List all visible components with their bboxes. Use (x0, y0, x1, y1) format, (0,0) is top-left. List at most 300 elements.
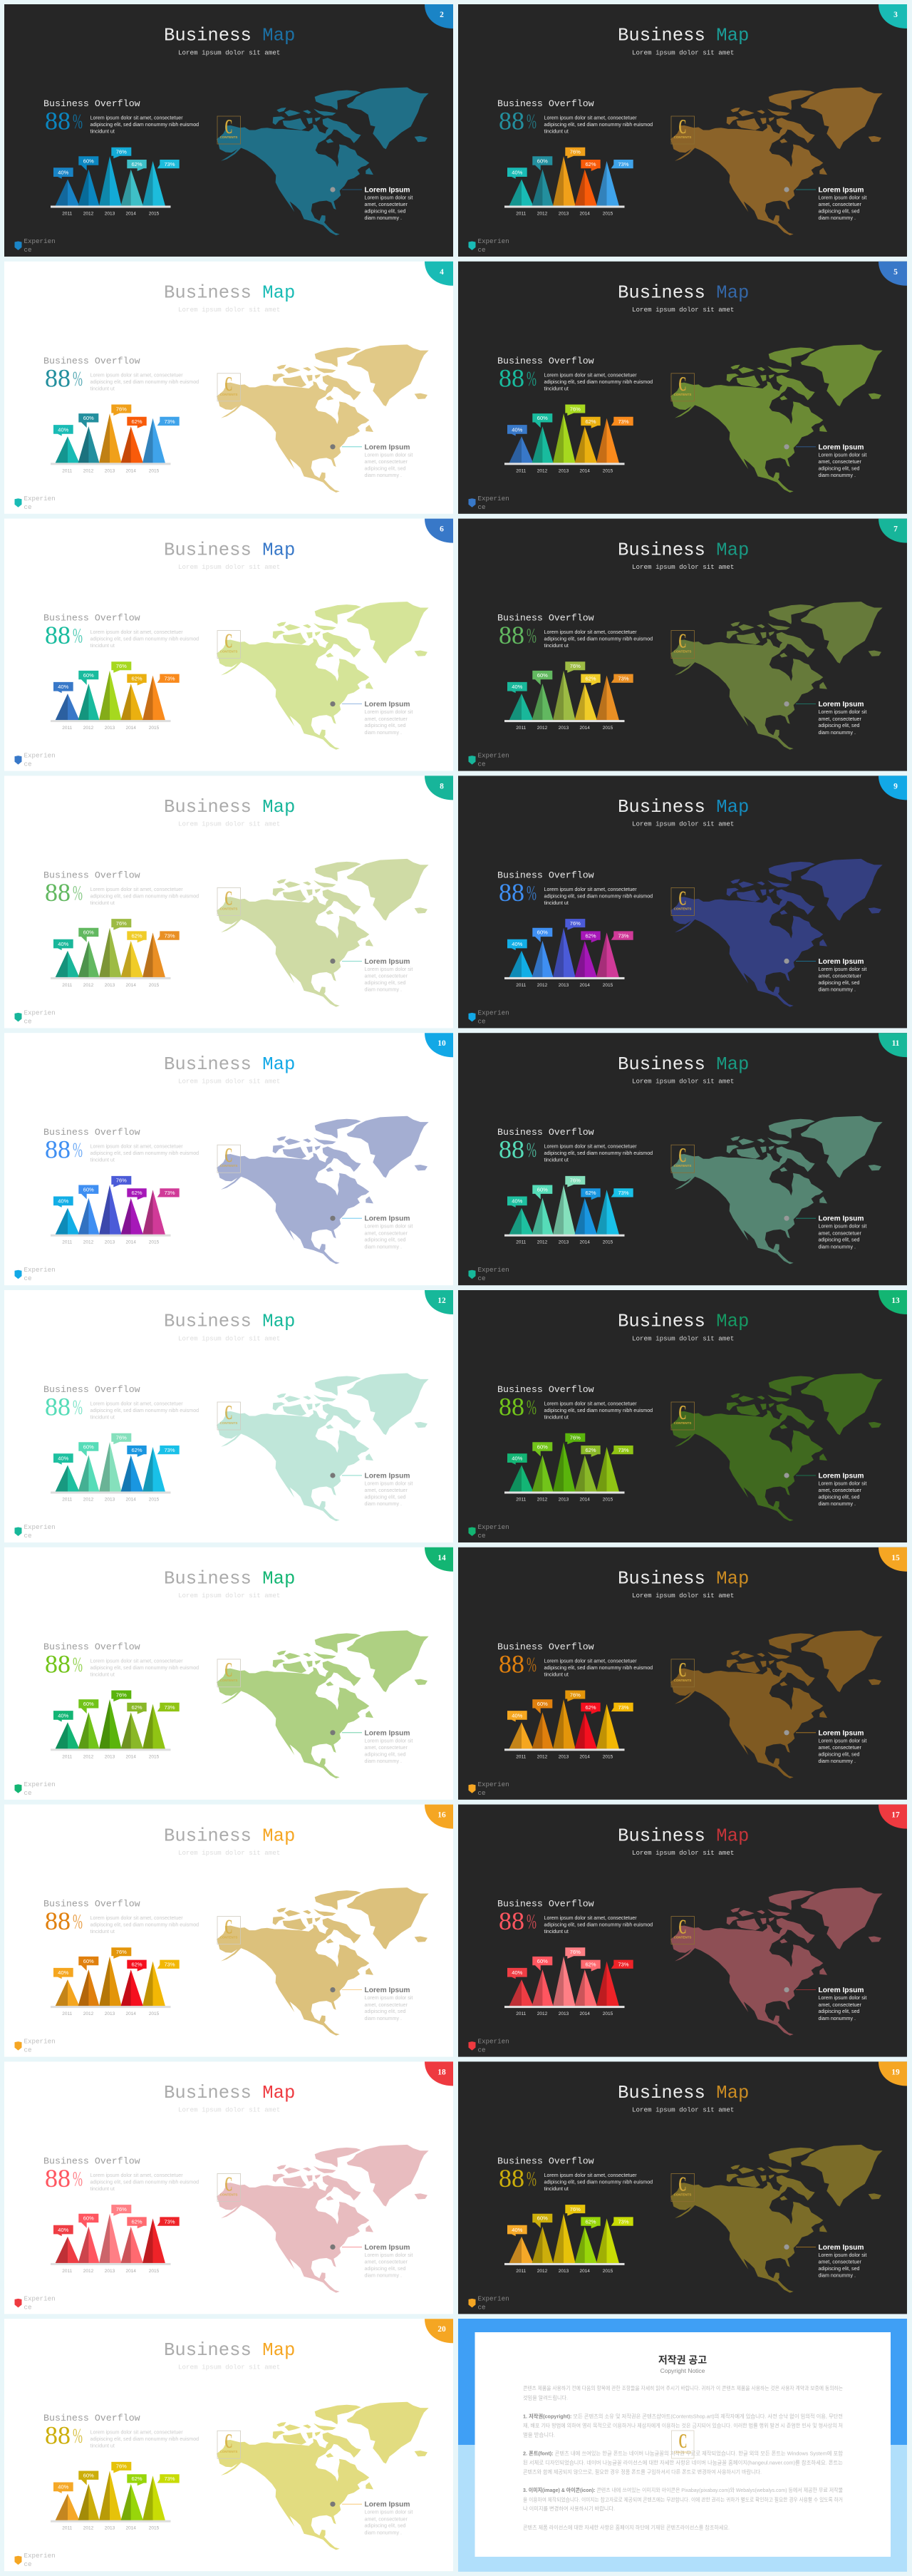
triangle chart (504, 919, 633, 988)
triangle chart: 60% (537, 929, 548, 936)
title: Business Map (618, 1569, 749, 1590)
stat 88%: % (73, 1910, 83, 1934)
triangle chart: 73% (164, 418, 175, 425)
title: Business Map (164, 1054, 295, 1075)
callout: amet, consectetuer (365, 1488, 408, 1493)
title: Business Map (618, 1825, 749, 1846)
title: Business Map (164, 282, 295, 303)
callout: amet, consectetuer (818, 1745, 861, 1751)
page badge: 2 (440, 11, 444, 19)
description: adipiscing elit, sed diam nonummy nibh euismod (90, 1150, 199, 1156)
callout: diam nonummy . (818, 215, 856, 221)
callout: Lorem ipsum dolor sit (818, 1481, 866, 1487)
stat 88%: 88 (45, 1907, 71, 1935)
callout: Lorem Ipsum (365, 958, 410, 966)
footer brand: Experien (24, 2038, 56, 2046)
callout: adipiscing elit, sed (818, 980, 860, 986)
stat 88%: 88 (45, 621, 71, 649)
triangle chart: 2014 (579, 1497, 590, 1503)
slide 10 (4, 1033, 453, 1285)
triangle chart: 2012 (537, 2269, 548, 2274)
description: tincidunt ut (544, 2186, 569, 2192)
triangle chart: 2014 (579, 468, 590, 473)
map (670, 344, 883, 493)
callout: adipiscing elit, sed (365, 723, 406, 728)
triangle chart: 62% (585, 418, 596, 425)
triangle chart (504, 2205, 633, 2274)
triangle chart: 73% (618, 2218, 629, 2225)
footer brand: Experien (24, 1523, 56, 1531)
triangle chart (51, 405, 180, 473)
footer brand: ce (477, 2303, 486, 2311)
slide background (458, 1290, 907, 1542)
copyright notice panel (458, 2319, 907, 2572)
subtitle: Lorem ipsum dolor sit amet (632, 306, 734, 314)
triangle chart: 2012 (537, 211, 548, 217)
map (217, 1374, 429, 1521)
triangle chart: 76% (116, 406, 127, 412)
callout: diam nonummy . (818, 473, 856, 478)
description: adipiscing elit, sed diam nonummy nibh euismod (90, 1408, 199, 1413)
triangle chart: 2013 (105, 211, 115, 217)
footer brand: Experien (477, 1009, 509, 1016)
triangle chart: 76% (116, 1949, 127, 1955)
callout: Lorem ipsum dolor sit (365, 195, 413, 201)
triangle chart: 60% (537, 1958, 548, 1964)
description: Lorem ipsum dolor sit amet, consectetuer (90, 372, 183, 378)
triangle chart: 2013 (105, 726, 115, 731)
triangle chart: 2014 (579, 211, 590, 217)
stat 88%: % (73, 2167, 83, 2190)
triangle chart (504, 1433, 633, 1503)
triangle chart: 2011 (516, 2011, 527, 2016)
logo: CONTENTS (220, 650, 237, 654)
triangle chart: 2012 (83, 726, 94, 731)
triangle chart (51, 2462, 180, 2531)
slide 16 (4, 1805, 453, 2057)
title: Business Map (164, 2340, 295, 2361)
logo: C (678, 1659, 687, 1681)
map (217, 1116, 429, 1264)
callout: diam nonummy . (818, 1501, 856, 1507)
callout: adipiscing elit, sed (818, 465, 860, 471)
description: adipiscing elit, sed diam nonummy nibh euismod (544, 1150, 653, 1156)
description: adipiscing elit, sed diam nonummy nibh euismod (544, 637, 653, 642)
slide background (458, 1547, 907, 1800)
description: adipiscing elit, sed diam nonummy nibh euismod (544, 1922, 653, 1928)
callout: Lorem Ipsum (365, 1729, 410, 1737)
triangle chart: 62% (585, 932, 596, 939)
slide 19 (458, 2061, 907, 2314)
stat 88%: 88 (499, 1393, 524, 1421)
stat 88% (499, 1907, 537, 1935)
stat 88%: % (527, 1138, 537, 1162)
logo (671, 116, 694, 144)
triangle chart: 73% (618, 1962, 629, 1968)
triangle chart: 2014 (579, 2269, 590, 2274)
callout: Lorem ipsum dolor sit (818, 709, 866, 715)
callout: Lorem Ipsum (818, 1215, 864, 1223)
triangle chart (504, 1947, 633, 2016)
triangle chart: 2011 (516, 211, 527, 217)
description: Lorem ipsum dolor sit amet, consectetuer (90, 1401, 183, 1407)
triangle chart: 62% (131, 676, 142, 682)
subtitle: Lorem ipsum dolor sit amet (178, 820, 280, 828)
page badge: 16 (437, 1811, 446, 1820)
callout: amet, consectetuer (818, 202, 861, 207)
triangle chart: 2013 (105, 1497, 115, 1503)
subtitle: Lorem ipsum dolor sit amet (178, 1077, 280, 1085)
callout (784, 1729, 866, 1764)
triangle chart: 40% (58, 2484, 69, 2490)
callout: Lorem ipsum dolor sit (365, 1995, 413, 2001)
page badge: 7 (893, 525, 898, 534)
triangle chart: 76% (570, 2206, 581, 2212)
description: Lorem ipsum dolor sit amet, consectetuer (544, 1144, 637, 1150)
footer brand: ce (477, 246, 486, 254)
callout: diam nonummy . (365, 215, 402, 221)
triangle chart: 76% (116, 1178, 127, 1184)
triangle chart (504, 1691, 633, 1759)
triangle chart: 62% (585, 1190, 596, 1196)
triangle chart: 76% (570, 1949, 581, 1955)
title: Business Map (164, 2083, 295, 2103)
watermark logo: C (678, 2431, 687, 2453)
callout (784, 958, 866, 993)
description: adipiscing elit, sed diam nonummy nibh euismod (90, 893, 199, 899)
slide background (458, 1033, 907, 1285)
page badge (425, 2319, 453, 2343)
slide background (4, 4, 453, 257)
triangle chart: 2011 (516, 2269, 527, 2274)
triangle chart: 2014 (125, 468, 136, 473)
triangle chart: 60% (83, 1701, 94, 1707)
footer brand (14, 495, 56, 511)
triangle chart: 40% (512, 426, 523, 433)
triangle chart: 76% (116, 663, 127, 669)
subtitle: Lorem ipsum dolor sit amet (178, 306, 280, 314)
triangle chart: 2013 (559, 2011, 569, 2016)
heading: Business Overflow (43, 1642, 140, 1652)
triangle chart: 73% (164, 2218, 175, 2225)
triangle chart: 2015 (149, 2011, 160, 2016)
callout (330, 958, 413, 993)
title: Business Map (618, 1054, 749, 1075)
triangle chart: 2014 (579, 1754, 590, 1759)
callout: Lorem ipsum dolor sit (818, 1995, 866, 2001)
notice body text: 재, 배포 기타 방법에 의하여 영리 목적으로 이용하거나 제삼자에게 이용하는 것은 금지되어 있습니다. 이러한 법률 행위 발견 시 준엄한 민사 및 형사상의 처 (523, 2422, 843, 2429)
callout: diam nonummy . (365, 2530, 402, 2535)
stat 88%: 88 (499, 1907, 524, 1935)
slide background (4, 262, 453, 514)
triangle chart: 2012 (537, 2011, 548, 2016)
logo: C (225, 1402, 232, 1424)
triangle chart: 76% (116, 148, 127, 155)
triangle chart: 76% (116, 2463, 127, 2470)
map (217, 1630, 429, 1778)
description: Lorem ipsum dolor sit amet, consectetuer (544, 372, 637, 378)
slide background (458, 4, 907, 257)
triangle chart: 2012 (83, 1754, 94, 1759)
description: tincidunt ut (90, 2186, 115, 2192)
triangle chart: 2014 (579, 1240, 590, 1245)
title: Business Map (164, 1569, 295, 1590)
stat 88%: % (73, 2424, 83, 2448)
page badge (425, 776, 453, 800)
callout: adipiscing elit, sed (818, 2009, 860, 2014)
notice body text: 벌을 받습니다. (523, 2431, 555, 2438)
title: Business Map (618, 26, 749, 46)
triangle chart: 2015 (603, 1497, 613, 1503)
triangle chart: 2015 (603, 726, 613, 731)
page badge (879, 776, 907, 800)
logo: CONTENTS (220, 2450, 237, 2453)
heading: Business Overflow (43, 870, 140, 880)
triangle chart: 60% (83, 2472, 94, 2478)
stat 88%: % (527, 1396, 537, 1419)
title: Business Map (164, 540, 295, 560)
callout: Lorem ipsum dolor sit (818, 452, 866, 458)
description: tincidunt ut (544, 1158, 569, 1163)
triangle chart: 60% (537, 1186, 548, 1192)
stat 88% (499, 107, 537, 135)
slide 20 (4, 2319, 453, 2571)
subtitle: Lorem ipsum dolor sit amet (178, 2363, 280, 2371)
logo (671, 887, 694, 915)
page badge (879, 1033, 907, 1057)
callout: Lorem Ipsum (818, 443, 864, 451)
triangle chart: 40% (512, 1969, 523, 1976)
callout: diam nonummy . (365, 730, 402, 736)
triangle chart: 2013 (105, 1754, 115, 1759)
slide 5 (458, 262, 907, 514)
description: tincidunt ut (544, 900, 569, 906)
callout: Lorem ipsum dolor sit (365, 452, 413, 458)
logo: C (678, 887, 687, 910)
notice body text: 된 서체로 디자인되었습니다. 네이버 나눔글꼴 라이선스에 대한 자세한 사항은 네이버 나눔글꼴 홈페이지(hangeul.naver.com)를 참조하세요. 폰트는 (523, 2459, 843, 2466)
footer brand: ce (24, 2560, 32, 2568)
title: Business Map (164, 26, 295, 46)
description: tincidunt ut (90, 1671, 115, 1677)
triangle chart: 2013 (105, 468, 115, 473)
title: Business Map (618, 1312, 749, 1332)
triangle chart: 40% (512, 2227, 523, 2233)
triangle chart: 60% (537, 1701, 548, 1707)
callout: adipiscing elit, sed (818, 2266, 860, 2272)
triangle chart: 2014 (125, 726, 136, 731)
logo: C (678, 631, 687, 653)
heading: Business Overflow (43, 1899, 140, 1910)
map (217, 2145, 429, 2293)
description: Lorem ipsum dolor sit amet, consectetuer (544, 2173, 637, 2178)
description: Lorem ipsum dolor sit amet, consectetuer (544, 629, 637, 635)
triangle chart: 2013 (559, 2269, 569, 2274)
page badge (879, 519, 907, 543)
logo: C (225, 2431, 232, 2453)
footer brand: Experien (24, 752, 56, 760)
map (670, 1887, 883, 2036)
callout: amet, consectetuer (818, 1488, 861, 1493)
slide background (458, 1805, 907, 2057)
logo (217, 631, 241, 659)
footer brand (469, 1781, 509, 1797)
slide background (4, 1033, 453, 1285)
description: Lorem ipsum dolor sit amet, consectetuer (90, 887, 183, 892)
callout: adipiscing elit, sed (818, 1751, 860, 1757)
stat 88% (45, 878, 83, 907)
triangle chart: 62% (585, 1704, 596, 1711)
stat 88%: 88 (499, 1649, 524, 1678)
triangle chart: 40% (512, 170, 523, 175)
callout: Lorem ipsum dolor sit (818, 1738, 866, 1743)
callout: adipiscing elit, sed (365, 1237, 406, 1243)
triangle chart: 62% (131, 1704, 142, 1711)
slide 15 (458, 1547, 907, 1800)
stat 88%: % (527, 367, 537, 391)
description: tincidunt ut (90, 643, 115, 649)
callout: amet, consectetuer (365, 716, 408, 722)
logo: CONTENTS (220, 1421, 237, 1425)
callout: diam nonummy . (818, 2273, 856, 2279)
callout: Lorem Ipsum (365, 443, 410, 451)
stat 88% (499, 1135, 537, 1164)
description: Lorem ipsum dolor sit amet, consectetuer (90, 1658, 183, 1664)
page badge: 11 (892, 1039, 900, 1048)
slide 4 (4, 262, 453, 514)
description: tincidunt ut (544, 386, 569, 391)
slide 17 (458, 1805, 907, 2057)
callout: Lorem Ipsum (365, 1215, 410, 1223)
triangle chart: 40% (512, 1456, 523, 1461)
description: Lorem ipsum dolor sit amet, consectetuer (544, 887, 637, 892)
triangle chart: 2015 (149, 211, 160, 217)
triangle chart: 60% (83, 158, 94, 164)
footer brand (14, 1266, 56, 1282)
triangle chart: 2013 (559, 983, 569, 988)
callout (330, 1215, 413, 1250)
triangle chart: 73% (618, 1704, 629, 1711)
map (670, 1116, 883, 1264)
footer brand: Experien (24, 1266, 56, 1274)
stat 88%: % (73, 624, 83, 648)
footer brand: ce (24, 2303, 32, 2311)
map (217, 1887, 429, 2036)
subtitle: Lorem ipsum dolor sit amet (178, 1334, 280, 1342)
callout (330, 1473, 413, 1507)
logo: C (678, 116, 687, 138)
triangle chart: 2013 (559, 211, 569, 217)
stat 88%: % (527, 110, 537, 133)
callout: diam nonummy . (818, 730, 856, 736)
stat 88% (45, 1135, 83, 1164)
logo: C (225, 887, 232, 910)
logo: CONTENTS (220, 1164, 237, 1168)
callout (330, 443, 413, 478)
triangle chart: 2014 (125, 2269, 136, 2274)
triangle chart: 40% (58, 1969, 69, 1976)
notice heading: 저작권 공고 (658, 2354, 707, 2366)
triangle chart: 76% (116, 1691, 127, 1698)
callout: adipiscing elit, sed (818, 723, 860, 728)
subtitle: Lorem ipsum dolor sit amet (178, 563, 280, 571)
triangle chart: 2013 (105, 983, 115, 988)
triangle chart: 62% (131, 2218, 142, 2225)
page badge (425, 1805, 453, 1829)
triangle chart: 76% (116, 1434, 127, 1441)
notice body text: 을 이용하여 제작되었습니다. 이미지는 참고자료로 제공되며 콘텐츠에는 무관합니다. 이에 관한 권리는 귀하가 별도로 확인하고 필요한 경우 사용할 수 있도록 하거 (523, 2496, 843, 2503)
slide 13 (458, 1290, 907, 1542)
callout: diam nonummy . (365, 2273, 402, 2279)
triangle chart: 40% (512, 684, 523, 690)
page badge: 5 (893, 268, 898, 277)
triangle chart: 73% (164, 1190, 175, 1196)
stat 88%: 88 (45, 1135, 71, 1164)
triangle chart: 60% (83, 1958, 94, 1964)
logo: CONTENTS (220, 1679, 237, 1682)
stat 88%: 88 (45, 878, 71, 907)
logo (671, 373, 694, 401)
logo: C (225, 1917, 232, 1939)
stat 88%: % (73, 1396, 83, 1419)
triangle chart: 2013 (105, 1240, 115, 1245)
callout (784, 1987, 866, 2021)
triangle chart: 62% (131, 1447, 142, 1453)
subtitle: Lorem ipsum dolor sit amet (178, 1849, 280, 1857)
footer brand: Experien (477, 1266, 509, 1274)
subtitle: Lorem ipsum dolor sit amet (632, 1077, 734, 1085)
notice body text: 콘텐츠와 함께 제공되지 않으므로, 필요한 경우 정품 폰트를 구입하셔서 다른 폰트로 변경하여 사용하시기 바랍니다. (523, 2468, 762, 2475)
footer brand: ce (24, 1017, 32, 1025)
triangle chart: 2011 (516, 468, 527, 473)
logo (671, 2173, 694, 2201)
page badge (879, 1547, 907, 1572)
logo (671, 1402, 694, 1430)
stat 88% (45, 1393, 83, 1421)
callout: adipiscing elit, sed (365, 2009, 406, 2014)
callout (330, 2244, 413, 2279)
slide background (4, 2319, 453, 2571)
logo (217, 1917, 241, 1944)
slide 18 (4, 2061, 453, 2314)
footer brand (469, 752, 509, 768)
triangle chart: 2015 (603, 468, 613, 473)
description: tincidunt ut (544, 643, 569, 649)
stat 88% (499, 878, 537, 907)
triangle chart: 2014 (579, 983, 590, 988)
description: adipiscing elit, sed diam nonummy nibh euismod (544, 1408, 653, 1413)
subtitle: Lorem ipsum dolor sit amet (632, 563, 734, 571)
stat 88%: 88 (499, 878, 524, 907)
logo (217, 1402, 241, 1430)
triangle chart: 2013 (105, 2526, 115, 2531)
triangle chart: 60% (83, 415, 94, 421)
triangle chart: 73% (164, 2475, 175, 2482)
triangle chart: 73% (618, 676, 629, 682)
map (217, 88, 429, 235)
triangle chart: 2015 (149, 2269, 160, 2274)
stat 88%: 88 (45, 107, 71, 135)
logo (217, 1145, 241, 1173)
page badge (879, 1805, 907, 1829)
footer brand (469, 1266, 509, 1282)
triangle chart: 2014 (125, 1754, 136, 1759)
callout: adipiscing elit, sed (365, 465, 406, 471)
subtitle: Lorem ipsum dolor sit amet (632, 1334, 734, 1342)
callout: amet, consectetuer (365, 459, 408, 465)
page badge (879, 1290, 907, 1314)
title: Business Map (618, 540, 749, 560)
callout: amet, consectetuer (365, 2260, 408, 2265)
